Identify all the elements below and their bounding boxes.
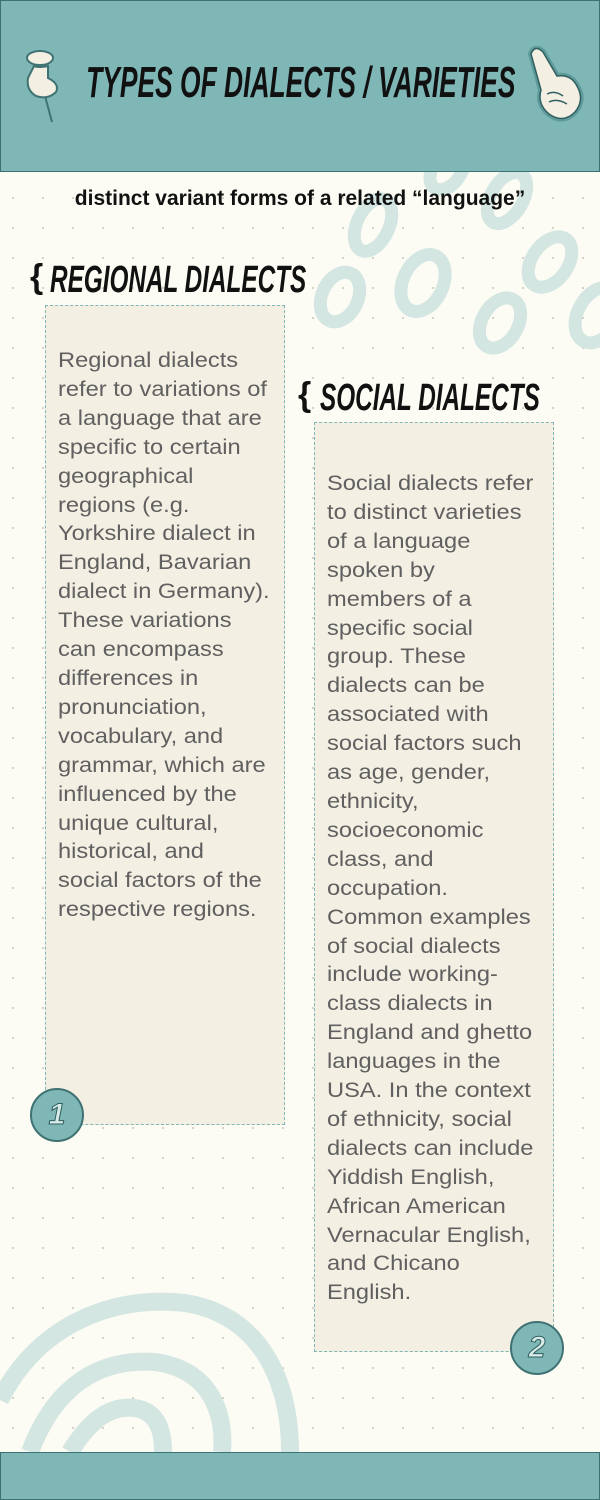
text: regional: can encompass <box>58 637 224 661</box>
text: social: Yiddish English, <box>327 1165 494 1189</box>
heading: regional dialects: { <box>30 258 43 296</box>
text: social: of ethnicity, social <box>327 1107 512 1131</box>
text: social: USA. In the context <box>327 1078 531 1102</box>
text: regional: specific to certain <box>58 435 241 459</box>
text: social: to distinct varieties <box>327 500 522 524</box>
text: regional <box>58 348 270 921</box>
text: regional: respective regions. <box>58 897 256 921</box>
text: social: socioeconomic <box>327 818 483 842</box>
text: social: England and ghetto <box>327 1020 532 1044</box>
footer band <box>0 1452 600 1500</box>
text: regional: a language that are <box>58 406 262 430</box>
heading: regional dialects: REGIONAL DIALECTS <box>50 259 306 301</box>
text: social: spoken by <box>327 558 435 582</box>
title: TYPES OF DIALECTS / VARIETIES <box>86 58 515 107</box>
text: regional: differences in <box>58 666 198 690</box>
text: regional: dialect in Germany). <box>58 579 270 603</box>
text: social: class, and <box>327 847 433 871</box>
text: social: class dialects in <box>327 991 493 1015</box>
number badge 2: 2 <box>529 1331 545 1364</box>
text: social: dialects can include <box>327 1136 533 1160</box>
text: regional: England, Bavarian <box>58 550 251 574</box>
text: social <box>327 471 533 1304</box>
text: regional: pronunciation, <box>58 695 207 719</box>
text: social: occupation. <box>327 876 448 900</box>
header band <box>0 0 600 172</box>
text: social: Social dialects refer <box>327 471 533 495</box>
text: social: African American <box>327 1194 506 1218</box>
text: social: as age, gender, <box>327 760 490 784</box>
text: social: languages in the <box>327 1049 501 1073</box>
text: regional: grammar, which are <box>58 753 266 777</box>
icon: pointing hand <box>528 46 584 122</box>
text: regional: historical, and <box>58 839 204 863</box>
text: social: associated with <box>327 702 489 726</box>
text: regional: regions (e.g. <box>58 493 189 517</box>
text: social: of a language <box>327 529 470 553</box>
text: regional: geographical <box>58 464 193 488</box>
text: social: English. <box>327 1280 411 1304</box>
number badge 2 <box>510 1321 564 1375</box>
number badge 1: 1 <box>49 1098 65 1131</box>
text: social: and Chicano <box>327 1251 460 1275</box>
heading: social dialects: SOCIAL DIALECTS <box>320 377 540 419</box>
text: social: group. These <box>327 644 466 668</box>
text: social: ethnicity, <box>327 789 419 813</box>
text: regional: social factors of the <box>58 868 262 892</box>
subtitle: distinct variant forms of a related “language” <box>75 187 525 210</box>
text: regional: Yorkshire dialect in <box>58 521 256 545</box>
text: social: Common examples <box>327 905 531 929</box>
text: regional: refer to variations of <box>58 377 267 401</box>
text: social: include working- <box>327 962 498 986</box>
panel: regional dialects <box>45 305 285 1125</box>
text: regional: influenced by the <box>58 782 237 806</box>
panel: social dialects <box>314 422 554 1352</box>
text: social: specific social <box>327 616 473 640</box>
text: regional: vocabulary, and <box>58 724 223 748</box>
text: social: of social dialects <box>327 934 501 958</box>
text: social: social factors such <box>327 731 522 755</box>
text: social: Vernacular English, <box>327 1223 531 1247</box>
text: regional: These variations <box>58 608 232 632</box>
number badge 1 <box>30 1088 84 1142</box>
heading: social dialects: { <box>298 376 311 414</box>
icon: pushpin <box>26 50 58 122</box>
text: regional: unique cultural, <box>58 810 218 834</box>
text: social: members of a <box>327 587 472 611</box>
text: social: dialects can be <box>327 673 485 697</box>
text: regional: Regional dialects <box>58 348 238 372</box>
